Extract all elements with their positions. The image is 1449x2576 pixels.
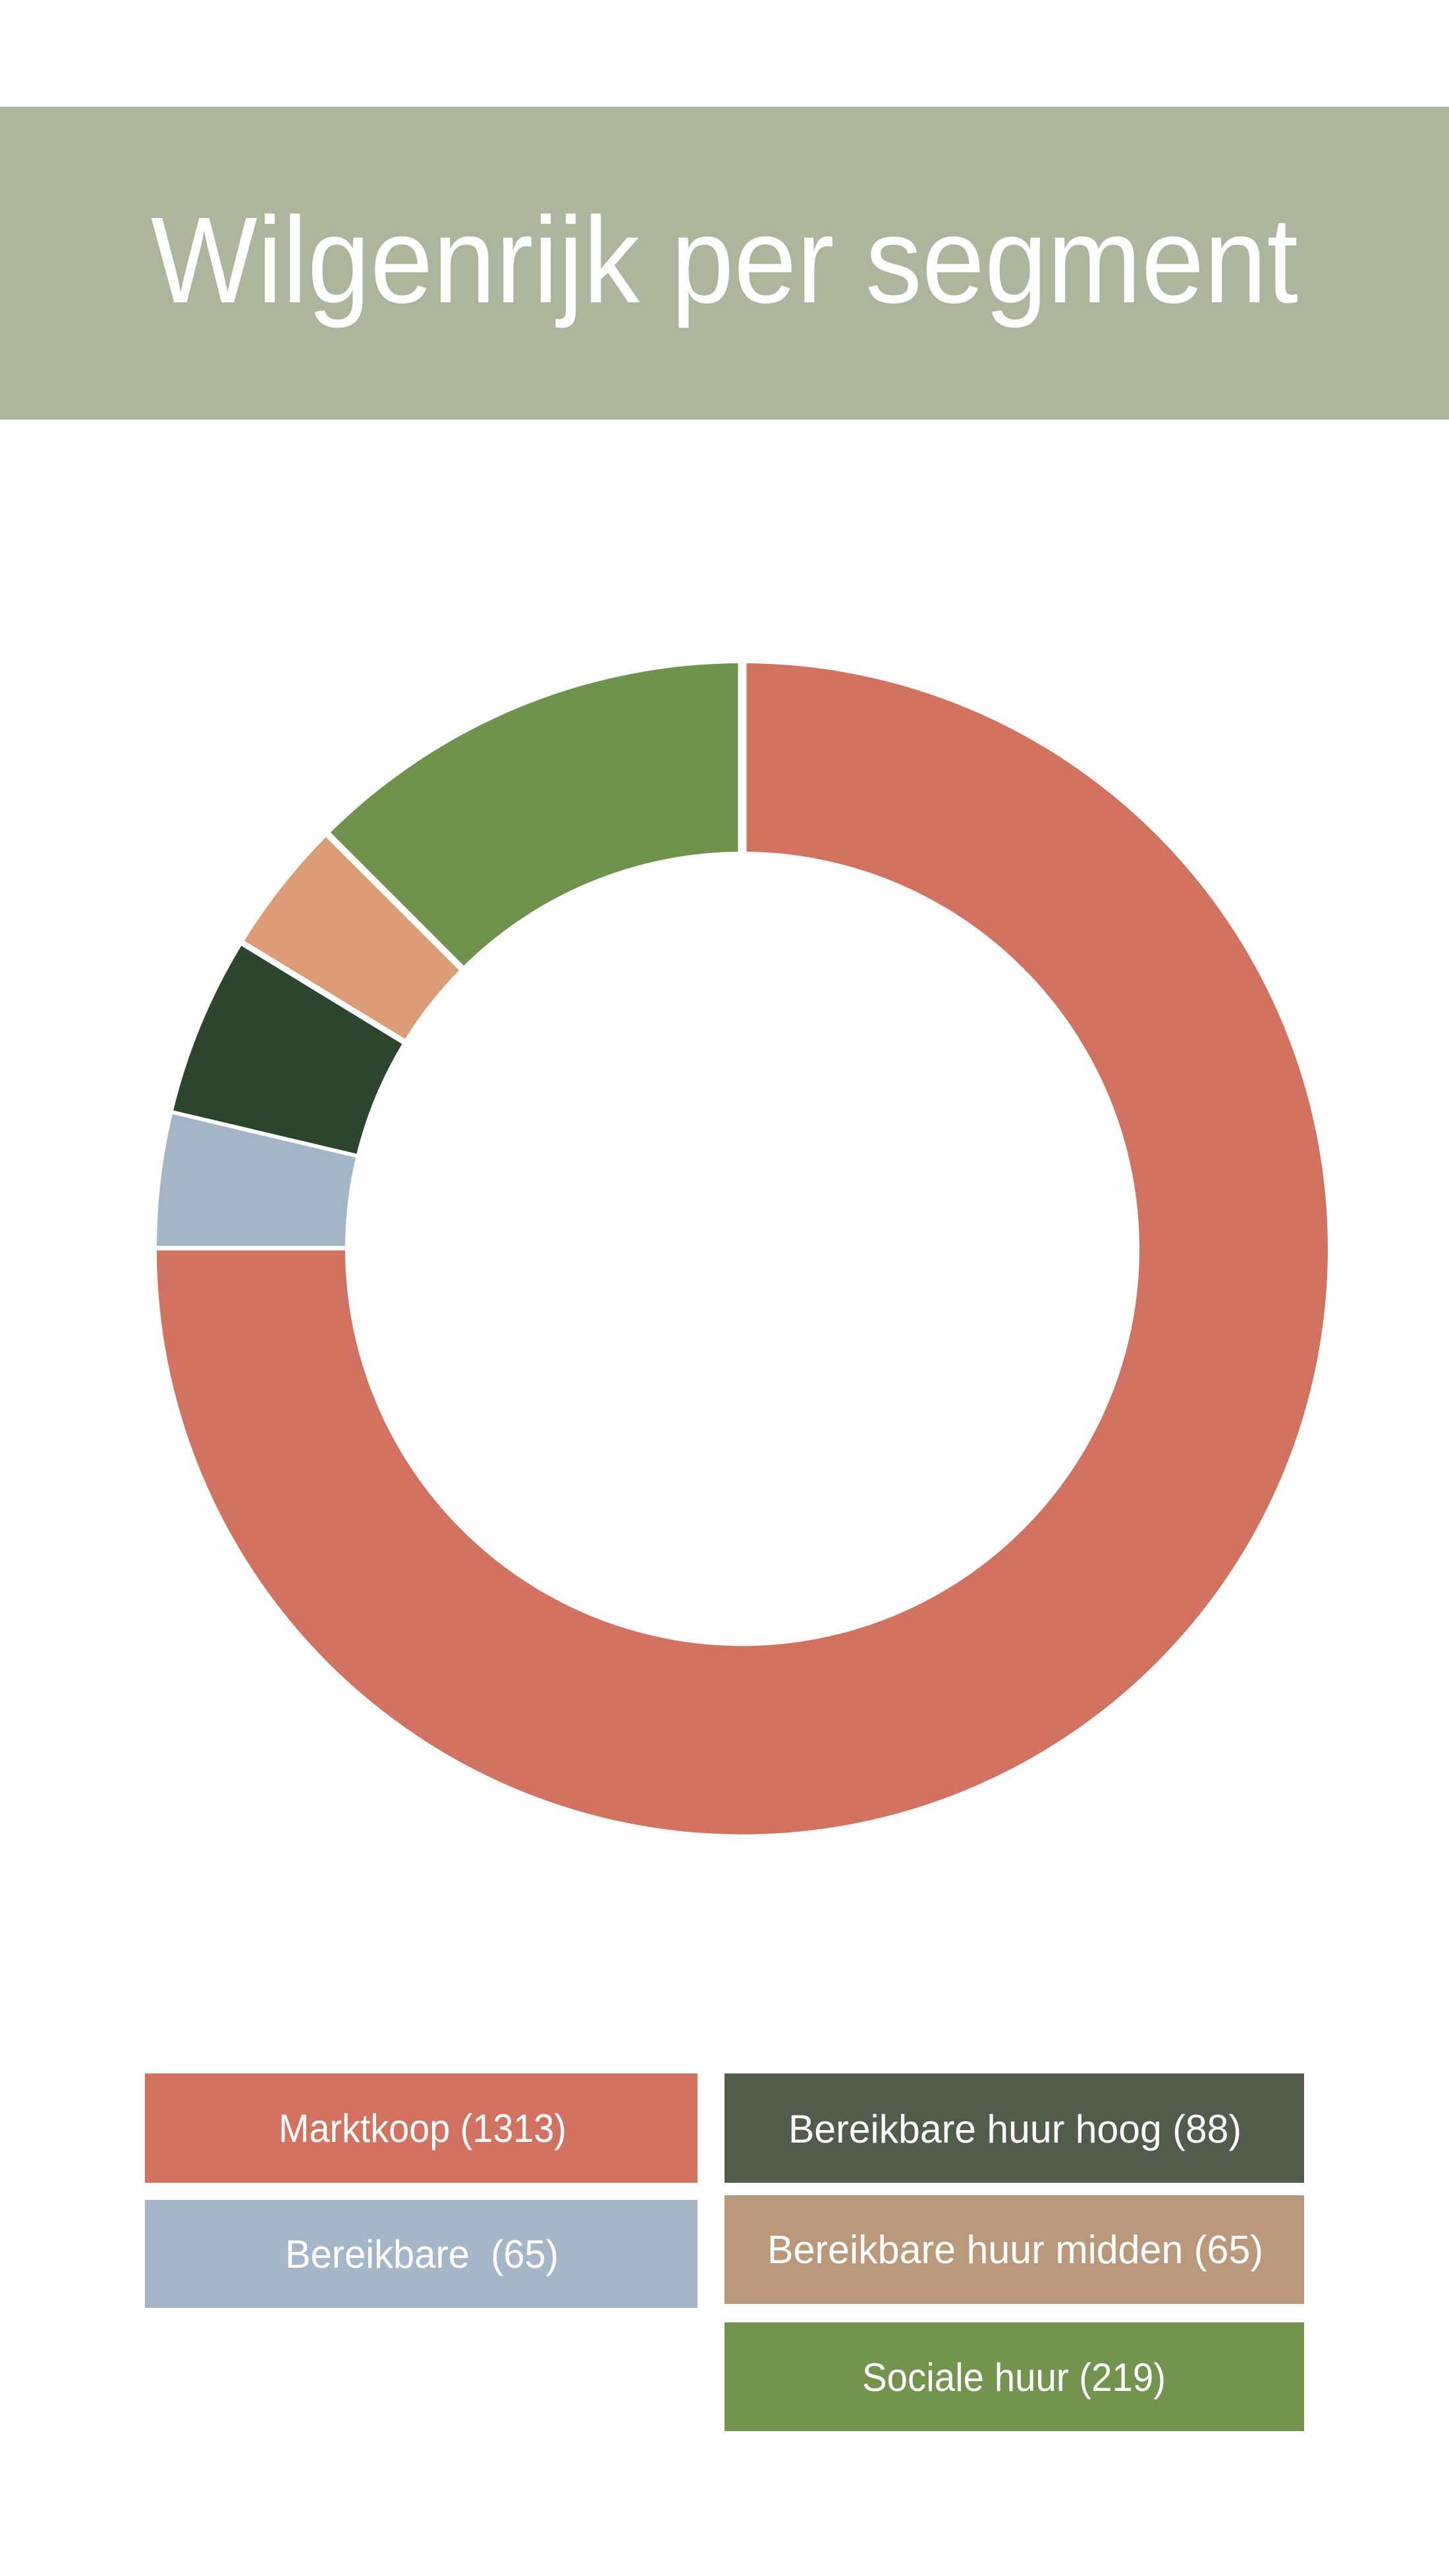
segment: Sociale huur [328, 663, 742, 968]
legend: Bereikbare huur hoog [724, 2073, 1304, 2183]
legend: Bereikbare huur hoog: Bereikbare huur hoog (88) [788, 2107, 1242, 2151]
legend: Marktkoop [145, 2073, 697, 2183]
segment: Bereikbare huur hoog [173, 943, 404, 1157]
title: Wilgenrijk per segment [151, 192, 1298, 329]
header banner [0, 107, 1449, 420]
legend: Bereikbare: Bereikbare (65) [285, 2232, 559, 2276]
legend: Sociale huur [724, 2322, 1304, 2431]
legend: Sociale huur: Sociale huur (219) [862, 2355, 1166, 2399]
donut chart [151, 659, 1328, 1834]
segment: Bereikbare huur midden [243, 835, 462, 1041]
segment: Bereikbare [157, 1113, 356, 1249]
legend: Marktkoop: Marktkoop (1313) [279, 2106, 566, 2151]
legend: Bereikbare huur midden [724, 2195, 1304, 2304]
legend: Bereikbare [145, 2200, 697, 2308]
legend: Bereikbare huur midden: Bereikbare huur midden (65) [767, 2228, 1263, 2272]
segment: Marktkoop [157, 663, 1328, 1834]
